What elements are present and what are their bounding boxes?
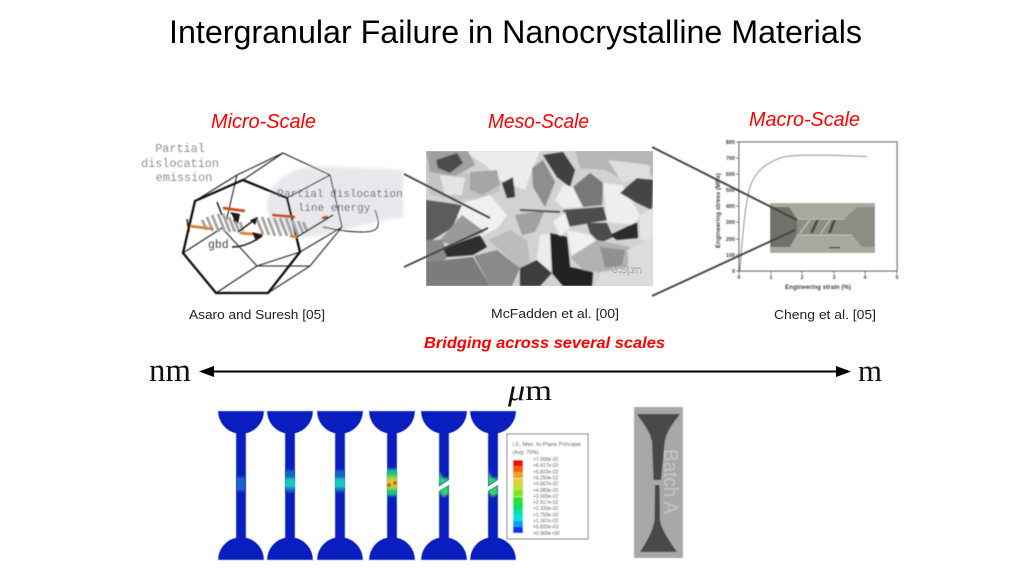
title: Intergranular Failure in Nanocrystalline Materials bbox=[169, 14, 862, 50]
rotated label: Batch A bbox=[659, 449, 681, 515]
grain thick edges bbox=[183, 180, 300, 293]
y-axis ticks: 0 bbox=[732, 269, 735, 275]
x-axis ticks: 4 bbox=[863, 275, 867, 281]
label: partial dislocation line energy: Partial dislocation bbox=[277, 189, 403, 201]
legend values: +5.833e-03 bbox=[533, 524, 559, 530]
scale arrow bbox=[149, 353, 882, 407]
double arrow bbox=[199, 366, 851, 377]
legend values: +1.750e-02 bbox=[533, 512, 559, 518]
y-axis ticks: 700 bbox=[726, 156, 735, 162]
orange dislocation segments bbox=[190, 226, 297, 237]
legend title: LE, Max. In-Plane Principal bbox=[512, 442, 580, 448]
citation: Asaro and Suresh [05] bbox=[189, 307, 325, 322]
label: gbd: gbd bbox=[208, 239, 229, 252]
legend values bbox=[533, 457, 560, 537]
scale bar: 0.5μm bbox=[612, 264, 642, 276]
colour bands bbox=[513, 460, 523, 533]
specimen shape bbox=[637, 414, 680, 480]
panel: macro-scale bbox=[716, 109, 899, 322]
specimen 2 bbox=[267, 411, 313, 560]
x-axis ticks bbox=[737, 275, 899, 281]
label: partial dislocation emission: Partial bbox=[155, 142, 205, 156]
legend title bbox=[512, 442, 580, 456]
legend title: (Avg: 75%) bbox=[512, 450, 539, 456]
axis titles: Engineering strain (%) bbox=[785, 285, 851, 291]
specimen inset bbox=[770, 203, 875, 253]
zoom lines: meso to macro bbox=[652, 147, 797, 296]
x-axis ticks: 0 bbox=[737, 275, 741, 281]
y-axis ticks: 600 bbox=[726, 172, 735, 178]
plot frame bbox=[736, 142, 897, 274]
specimen 5 (fractured) bbox=[421, 411, 467, 560]
legend values: +4.083e-02 bbox=[533, 488, 559, 494]
x-axis ticks: 3 bbox=[832, 275, 836, 281]
legend values: +7.000e-02 bbox=[533, 457, 559, 463]
label: partial dislocation emission: dislocation bbox=[141, 157, 219, 171]
legend values: +5.250e-02 bbox=[533, 476, 559, 482]
zoom lines: micro to meso bbox=[404, 174, 490, 267]
specimen 1 bbox=[218, 411, 264, 560]
legend: strain colour scale bbox=[507, 434, 588, 539]
y-axis ticks: 200 bbox=[726, 237, 735, 243]
label: micrometre: μm bbox=[507, 374, 552, 407]
y-axis ticks: 100 bbox=[726, 253, 735, 259]
legend values: +0.000e+00 bbox=[533, 531, 560, 537]
dislocation band bbox=[202, 214, 307, 236]
specimen 3 bbox=[317, 411, 363, 560]
label: partial dislocation emission: emission bbox=[156, 171, 212, 185]
stress-strain chart bbox=[716, 140, 899, 291]
panel: micro-scale bbox=[141, 111, 403, 322]
micrograph bbox=[426, 151, 653, 286]
x-axis ticks: 1 bbox=[769, 275, 773, 281]
specimen 4 bbox=[369, 411, 415, 560]
bridging caption: Bridging across several scales bbox=[424, 335, 665, 352]
legend values: +1.167e-02 bbox=[533, 518, 559, 524]
panel: meso-scale bbox=[426, 111, 653, 321]
grain thin edges bbox=[183, 153, 342, 293]
line-energy leader bbox=[323, 210, 378, 232]
photo: fractured specimen "Batch A" bbox=[634, 407, 683, 558]
legend values: +5.833e-02 bbox=[533, 470, 559, 476]
dislocation arrows bbox=[187, 202, 333, 247]
citation: Cheng et al. [05] bbox=[774, 307, 876, 322]
legend values: +6.417e-02 bbox=[533, 463, 559, 469]
legend values: +3.500e-02 bbox=[533, 494, 559, 500]
y-axis ticks bbox=[726, 140, 735, 275]
heading: meso-scale: Meso-Scale bbox=[488, 111, 589, 133]
y-axis ticks: 800 bbox=[726, 140, 735, 146]
gray highlight blob bbox=[267, 166, 403, 237]
x-axis ticks: 2 bbox=[800, 275, 804, 281]
y-axis ticks: 500 bbox=[726, 188, 735, 194]
citation: McFadden et al. [00] bbox=[491, 306, 619, 321]
x-axis ticks: 5 bbox=[895, 275, 899, 281]
label: m: m bbox=[858, 353, 882, 388]
heading: micro-scale: Micro-Scale bbox=[211, 111, 316, 133]
legend values: +2.333e-02 bbox=[533, 506, 559, 512]
label: nm: nm bbox=[149, 353, 191, 389]
stress-strain chart: Engineering stress (MPa) bbox=[716, 173, 722, 248]
label: partial dislocation line energy bbox=[277, 189, 403, 215]
legend values: +2.917e-02 bbox=[533, 500, 559, 506]
diagram: dodecahedral grain bbox=[141, 142, 403, 293]
label: partial dislocation emission bbox=[141, 142, 219, 185]
simulation: dogbone specimens bbox=[218, 411, 516, 560]
heading: macro-scale: Macro-Scale bbox=[749, 109, 860, 131]
label: partial dislocation line energy: line energy bbox=[298, 203, 371, 215]
specimen 6 (fractured) bbox=[470, 411, 516, 560]
y-axis ticks: 300 bbox=[726, 220, 735, 226]
legend values: +4.667e-02 bbox=[533, 482, 559, 488]
y-axis ticks: 400 bbox=[726, 204, 735, 210]
stress curve bbox=[740, 155, 867, 271]
